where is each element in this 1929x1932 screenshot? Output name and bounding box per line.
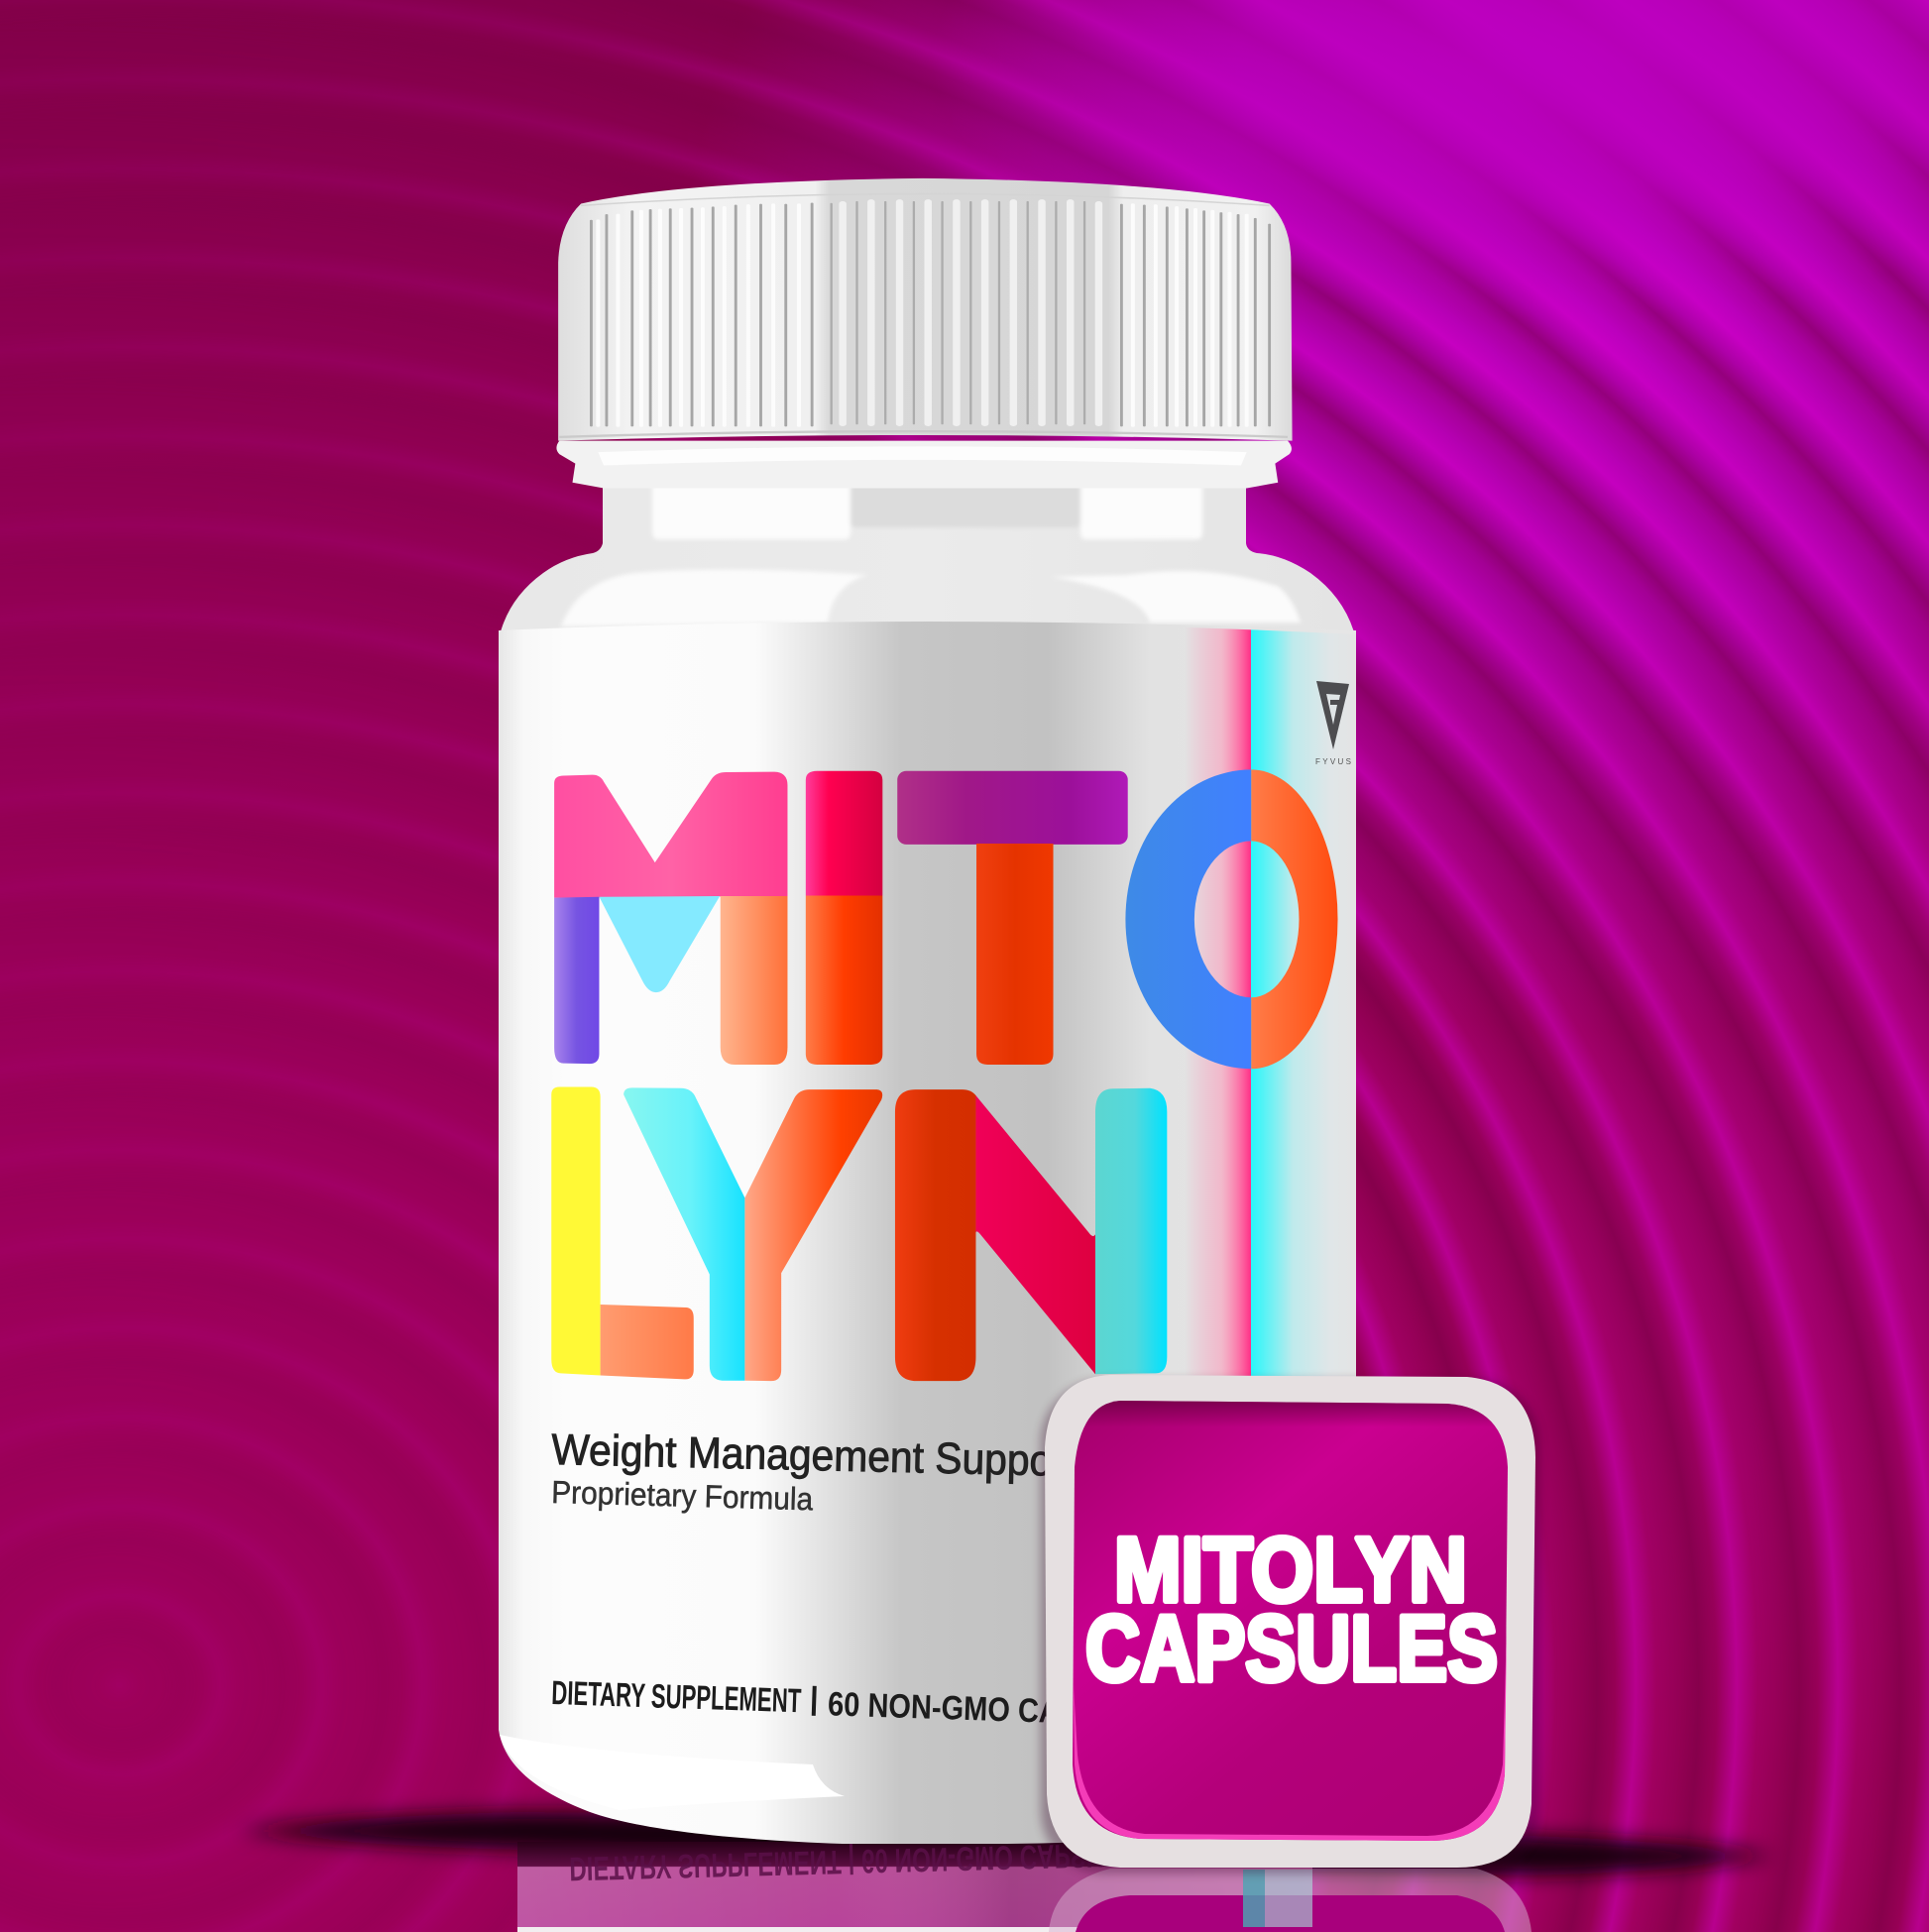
badge inner panel xyxy=(1073,1401,1508,1841)
cap ridges xyxy=(591,202,1270,425)
label colour stripes xyxy=(1191,628,1326,1376)
badge text: MITOLYN xyxy=(1114,1520,1467,1621)
brand logo FYVUS xyxy=(1315,681,1351,766)
product scene xyxy=(241,178,1772,1932)
letter M xyxy=(554,772,787,1065)
letter T xyxy=(897,771,1128,1065)
badge inner rim glow xyxy=(1074,1626,1507,1841)
letter O xyxy=(1125,769,1338,1069)
letter Y xyxy=(624,1087,882,1381)
bottle reflection on floor xyxy=(517,1835,1312,1932)
label text: dietary supplement line xyxy=(551,1674,1176,1735)
neck glass highlights xyxy=(561,466,1301,626)
badge shadow xyxy=(1041,1380,1539,1874)
brand logo FYVUS: FYVUS xyxy=(1315,757,1351,766)
reflected label text: DIETARY SUPPLEMENT | 60 NON-GMO CAPSULES xyxy=(569,1835,1151,1887)
cap body xyxy=(558,178,1293,441)
letter L xyxy=(551,1087,694,1379)
pad reflection xyxy=(1049,1869,1532,1932)
badge frame xyxy=(1045,1375,1535,1868)
floor shadow xyxy=(238,1812,1774,1875)
label text: Proprietary Formula: Proprietary Formula xyxy=(551,1474,814,1517)
badge: Mitolyn Capsules xyxy=(1041,1375,1539,1874)
bottle base highlight xyxy=(500,1735,845,1810)
label text: dietary supplement line: DIETARY SUPPLEMENT xyxy=(551,1674,802,1720)
badge inner top shade xyxy=(1073,1401,1508,1841)
letter N xyxy=(895,1088,1167,1381)
bottle neck and shoulders xyxy=(499,466,1356,639)
bottle body xyxy=(499,622,1356,1844)
label text: Weight Management Support: Weight Management Support xyxy=(551,1425,1078,1486)
badge: Mitolyn Capsules: CAPSULES xyxy=(1085,1596,1498,1700)
cap xyxy=(556,178,1293,489)
letter I xyxy=(806,771,882,1065)
bottle xyxy=(499,466,1356,1844)
cap collar xyxy=(556,441,1292,489)
label text: dietary supplement line: 60 NON-GMO CAPSULES xyxy=(828,1685,1176,1735)
wordmark MITO LYN xyxy=(551,769,1338,1381)
